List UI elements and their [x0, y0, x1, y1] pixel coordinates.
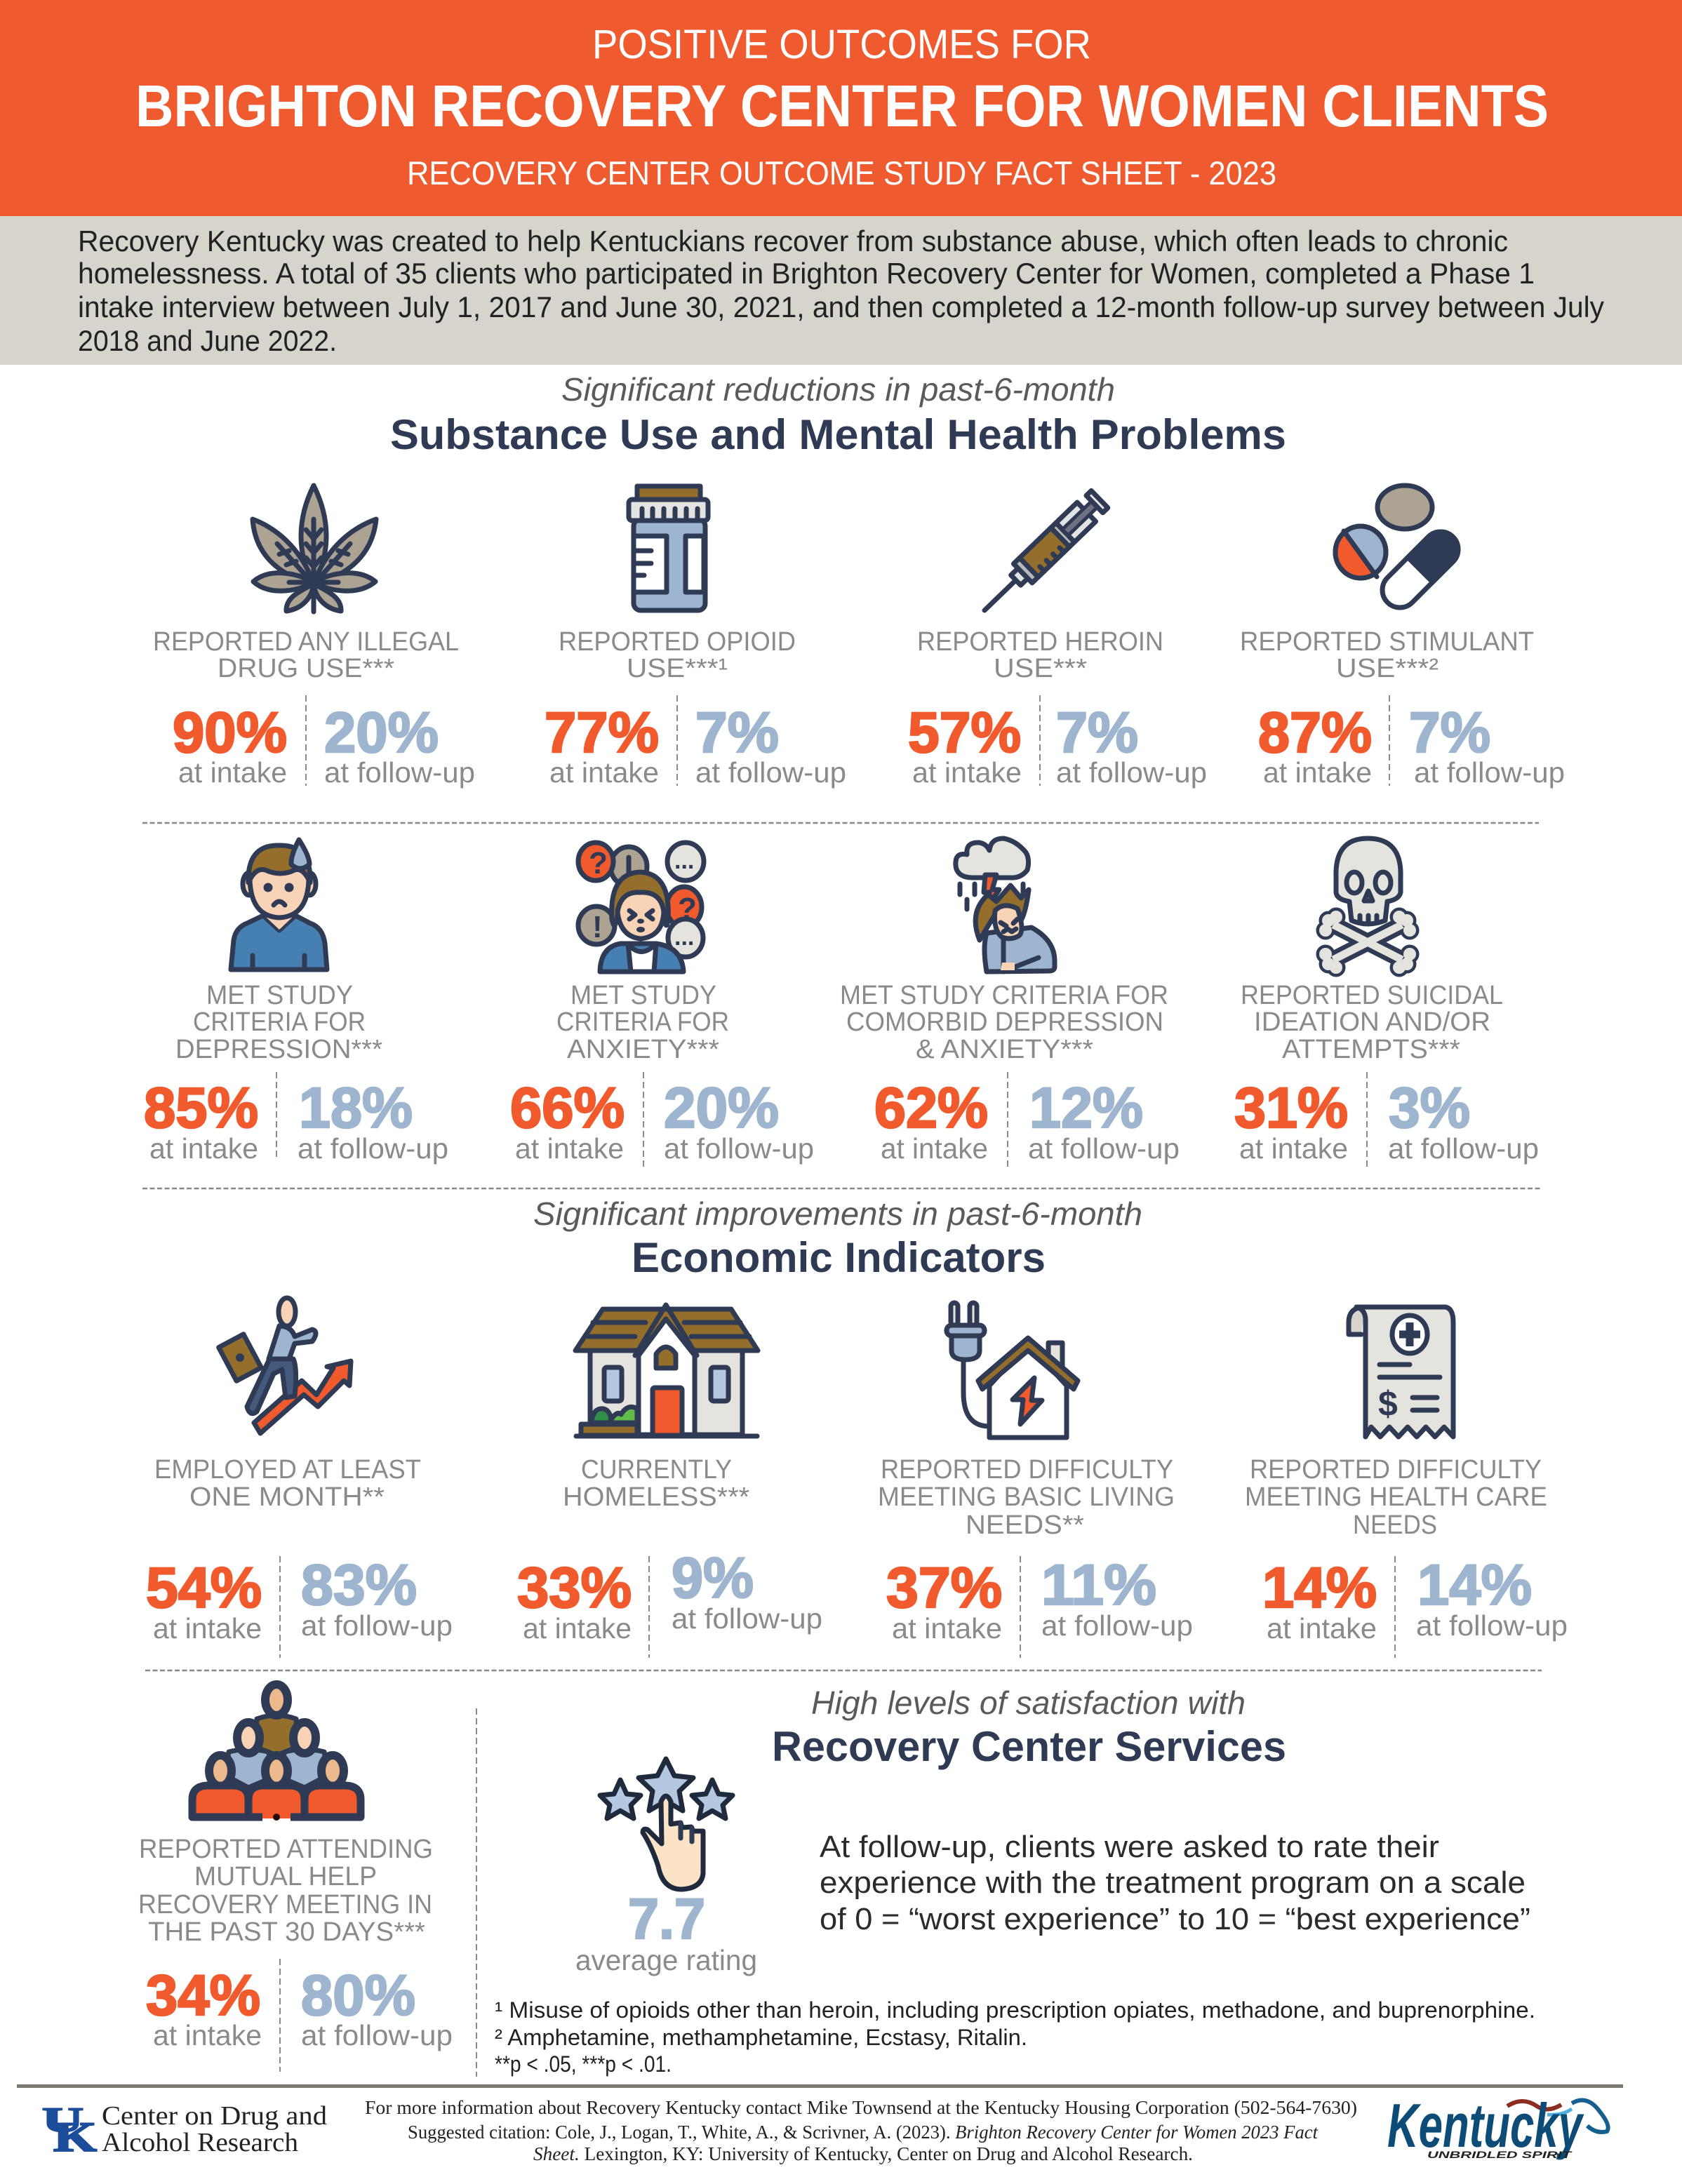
section heading: substance use: Significant reductions in past-6-month [561, 371, 1115, 408]
card: illegal drug use [153, 485, 475, 789]
values: at follow-up [324, 756, 475, 789]
icon: pills [1335, 485, 1465, 615]
icon: anxious person with speech bubbles: ? [678, 892, 697, 926]
rating explanation text: At follow-up, clients were asked to rate their [820, 1830, 1439, 1864]
logo: UK Center on Drug and Alcohol Research: U [42, 2100, 84, 2139]
label: CURRENTLY [581, 1455, 732, 1485]
values: 57% [908, 701, 1021, 765]
values: 66% [510, 1076, 625, 1140]
values [1262, 1553, 1568, 1658]
card: anxiety: ANXIETY*** [567, 1035, 719, 1064]
logo: UK Center on Drug and Alcohol Research: K [53, 2114, 97, 2160]
values [1234, 1072, 1539, 1167]
values: 7% [1056, 701, 1138, 765]
icon: anxious person with speech bubbles: ! [592, 910, 603, 944]
label: REPORTED DIFFICULTY [881, 1455, 1173, 1485]
values: 37% [886, 1556, 1002, 1620]
label: REPORTED ANY ILLEGAL [153, 627, 459, 657]
card: suicidal ideation: IDEATION AND/OR [1254, 1007, 1490, 1037]
intro text band: Recovery Kentucky was created to help Kentuckians recover from substance abuse, which often leads to chronic [78, 225, 1508, 257]
section heading: economic indicators [533, 1195, 1142, 1281]
values [886, 1553, 1193, 1658]
values: 7% [1409, 701, 1490, 765]
icon: syringe [975, 490, 1109, 620]
logo: UK Center on Drug and Alcohol Research [42, 2100, 327, 2160]
icon: house [575, 1305, 758, 1436]
icon: cannabis leaf [253, 485, 376, 612]
values: 20% [324, 701, 439, 765]
values [173, 695, 475, 789]
icon: anxious person with speech bubbles: ... [674, 924, 694, 951]
section heading: economic indicators: Significant improvements in past-6-month [533, 1195, 1142, 1232]
values [510, 1072, 814, 1167]
values: 7% [695, 701, 779, 765]
rating explanation text: experience with the treatment program on a scale [820, 1865, 1526, 1900]
icon: anxious person with speech bubbles: ? [589, 846, 608, 880]
values: 80% [301, 1964, 415, 2028]
footnotes: ² Amphetamine, methamphetamine, Ecstasy, Ritalin. [495, 2025, 1027, 2050]
values [908, 695, 1207, 789]
values: at intake [178, 756, 287, 789]
values: at follow-up [1416, 1609, 1568, 1642]
card: suicidal ideation: ATTEMPTS*** [1282, 1035, 1460, 1064]
section heading: economic indicators: Economic Indicators [632, 1234, 1046, 1281]
card: employed: ONE MONTH** [189, 1482, 385, 1512]
icon: sad person [231, 840, 327, 970]
label: REPORTED HEROIN [917, 627, 1163, 657]
icon: person climbing rising arrow [219, 1298, 351, 1433]
label: REPORTED STIMULANT [1240, 627, 1534, 657]
card: suicidal ideation [1234, 838, 1539, 1167]
card: health care needs: MEETING HEALTH CARE [1245, 1482, 1547, 1512]
label: EMPLOYED AT LEAST [154, 1455, 421, 1485]
footnotes: **p < .05, ***p < .01. [495, 2051, 672, 2077]
values: at intake [153, 1612, 262, 1644]
intro text band: intake interview between July 1, 2017 and June 30, 2021, and then completed a 12-month follow-up survey between July [78, 290, 1604, 323]
values: at intake [149, 1132, 258, 1165]
values: 11% [1041, 1553, 1156, 1617]
intro text band: homelessness. A total of 35 clients who participated in Brighton Recovery Center for Women, completed a Phase 1 [78, 257, 1535, 290]
card: health care needs [1245, 1307, 1568, 1658]
average rating [575, 1887, 757, 1976]
values: at follow-up [301, 2019, 453, 2051]
card: employed [146, 1298, 453, 1658]
label: REPORTED OPIOID [559, 627, 796, 657]
average rating: average rating [575, 1944, 757, 1976]
footer citation: Sheet. Lexington, KY: University of Kentucky, Center on Drug and Alcohol Research. [533, 2143, 1193, 2164]
logo: Kentucky Unbridled Spirit: Kentucky [1387, 2091, 1584, 2160]
rating explanation text: of 0 = “worst experience” to 10 = “best experience” [820, 1902, 1530, 1936]
values: 12% [1029, 1076, 1143, 1140]
card: comorbid depression and anxiety [840, 838, 1180, 1167]
values: at follow-up [695, 756, 846, 789]
label: REPORTED ATTENDING [139, 1835, 433, 1864]
values: 20% [664, 1076, 779, 1140]
values: at intake [523, 1612, 632, 1644]
section heading: recovery center services [772, 1684, 1286, 1770]
card: mutual help meetings: MUTUAL HELP [194, 1862, 377, 1891]
values: 31% [1234, 1076, 1348, 1140]
values: 33% [517, 1556, 632, 1620]
values: at intake [549, 756, 659, 789]
footer citation [365, 2097, 1357, 2164]
icon: anxious person with speech bubbles: ... [674, 848, 694, 874]
values: 3% [1389, 1076, 1470, 1140]
icon: skull and crossbones [1319, 838, 1417, 974]
intro text band [0, 216, 1682, 365]
subtitle: RECOVERY CENTER OUTCOME STUDY FACT SHEET - 2023 [407, 154, 1276, 192]
intro text band: 2018 and June 2022. [78, 324, 337, 357]
icon: house with electric plug [947, 1303, 1078, 1438]
values: at follow-up [672, 1602, 822, 1635]
icon: pill bottle [629, 486, 708, 610]
footnotes [495, 1997, 1535, 2077]
icon: medical bill receipt: $ [1378, 1384, 1398, 1423]
values: at intake [153, 2019, 262, 2051]
card: stimulant use: USE***² [1336, 654, 1439, 683]
section heading: recovery center services: Recovery Center Services [772, 1723, 1286, 1770]
values: 14% [1417, 1553, 1532, 1617]
values: 18% [299, 1076, 413, 1140]
card: anxiety: CRITERIA FOR [556, 1007, 729, 1037]
footer citation: For more information about Recovery Kentucky contact Mike Townsend at the Kentucky Housing Corporation (502-564-7630) [365, 2097, 1357, 2118]
values: 9% [672, 1546, 754, 1610]
values: 14% [1262, 1556, 1377, 1620]
icon: anxious person with speech bubbles [578, 843, 704, 972]
values: at intake [912, 756, 1022, 789]
card: illegal drug use: DRUG USE*** [218, 654, 394, 683]
logo: UK Center on Drug and Alcohol Research: Center on Drug and [102, 2101, 327, 2131]
card: health care needs: NEEDS [1353, 1510, 1437, 1540]
icon: hand pointing at rating stars [600, 1759, 733, 1889]
values: at follow-up [1414, 756, 1565, 789]
values [144, 1072, 448, 1165]
values: at intake [515, 1132, 624, 1165]
values: 90% [173, 701, 287, 765]
values: 85% [144, 1076, 258, 1140]
values [146, 1959, 453, 2072]
card: heroin use [908, 490, 1207, 789]
card: homeless: HOMELESS*** [563, 1482, 749, 1512]
card: heroin use: USE*** [994, 654, 1087, 683]
section heading: substance use: Substance Use and Mental Health Problems [390, 411, 1286, 458]
values: 62% [874, 1076, 988, 1140]
section heading: recovery center services: High levels of satisfaction with [811, 1684, 1246, 1721]
card: mutual help meetings: THE PAST 30 DAYS*** [148, 1917, 425, 1947]
values: at intake [892, 1612, 1002, 1644]
card: basic living needs [878, 1303, 1193, 1658]
card: homeless [517, 1305, 822, 1658]
values: 87% [1258, 701, 1372, 765]
footnotes: ¹ Misuse of opioids other than heroin, including prescription opiates, methadone, and buprenorphine. [495, 1997, 1535, 2023]
average rating: 7.7 [628, 1887, 705, 1951]
card: depression: CRITERIA FOR [193, 1007, 366, 1037]
values [874, 1072, 1180, 1167]
values: at follow-up [664, 1132, 814, 1165]
values [517, 1546, 822, 1658]
values: at follow-up [1041, 1609, 1193, 1642]
card: comorbid depression and anxiety: COMORBID DEPRESSION [846, 1007, 1163, 1037]
label: MET STUDY CRITERIA FOR [840, 981, 1168, 1010]
section heading: substance use [390, 371, 1286, 458]
card: stimulant use [1240, 485, 1565, 789]
footer citation: Suggested citation: Cole, J., Logan, T., White, A., & Scrivner, A. (2023). Brighton Recovery Center for Women 2023 Fact [408, 2122, 1319, 2143]
main title: BRIGHTON RECOVERY CENTER FOR WOMEN CLIENTS [135, 73, 1549, 139]
card: opioid use [545, 486, 846, 789]
values: at intake [881, 1132, 988, 1165]
values [146, 1553, 453, 1658]
label: REPORTED SUICIDAL [1241, 981, 1503, 1010]
card: comorbid depression and anxiety: & ANXIETY*** [916, 1035, 1093, 1064]
label: MET STUDY [570, 981, 716, 1010]
card: opioid use: USE***¹ [627, 654, 728, 683]
values: at follow-up [298, 1132, 448, 1165]
card: basic living needs: MEETING BASIC LIVING [878, 1482, 1175, 1512]
card: anxiety [510, 843, 814, 1167]
label: MET STUDY [206, 981, 353, 1010]
values: at intake [1267, 1612, 1377, 1644]
values [1258, 695, 1565, 789]
values: 83% [301, 1553, 417, 1617]
values: 34% [146, 1964, 260, 2028]
values: at intake [1263, 756, 1372, 789]
card: mutual help meetings [138, 1684, 453, 2072]
card: depression: DEPRESSION*** [175, 1035, 382, 1064]
card: depression [144, 840, 448, 1165]
title line: positive outcomes: POSITIVE OUTCOMES FOR [592, 22, 1091, 67]
values: at follow-up [1388, 1132, 1539, 1165]
logo: UK Center on Drug and Alcohol Research: Alcohol Research [102, 2128, 298, 2157]
values [545, 695, 846, 789]
card: basic living needs: NEEDS** [966, 1510, 1084, 1540]
header banner [0, 0, 1682, 216]
values: at follow-up [1056, 756, 1207, 789]
icon: group of people [192, 1684, 361, 1822]
icon: stressed person under storm cloud [956, 838, 1055, 972]
values: 54% [146, 1556, 262, 1620]
card: mutual help meetings: RECOVERY MEETING IN [138, 1890, 432, 1920]
label: REPORTED DIFFICULTY [1250, 1455, 1542, 1485]
rating explanation text [820, 1830, 1530, 1936]
values: at intake [1239, 1132, 1348, 1165]
values: at follow-up [301, 1609, 453, 1642]
icon: medical bill receipt [1349, 1307, 1453, 1437]
values: at follow-up [1028, 1132, 1180, 1165]
logo: Kentucky Unbridled Spirit: UNBRIDLED SPIRIT [1427, 2149, 1573, 2160]
values: 77% [545, 701, 659, 765]
